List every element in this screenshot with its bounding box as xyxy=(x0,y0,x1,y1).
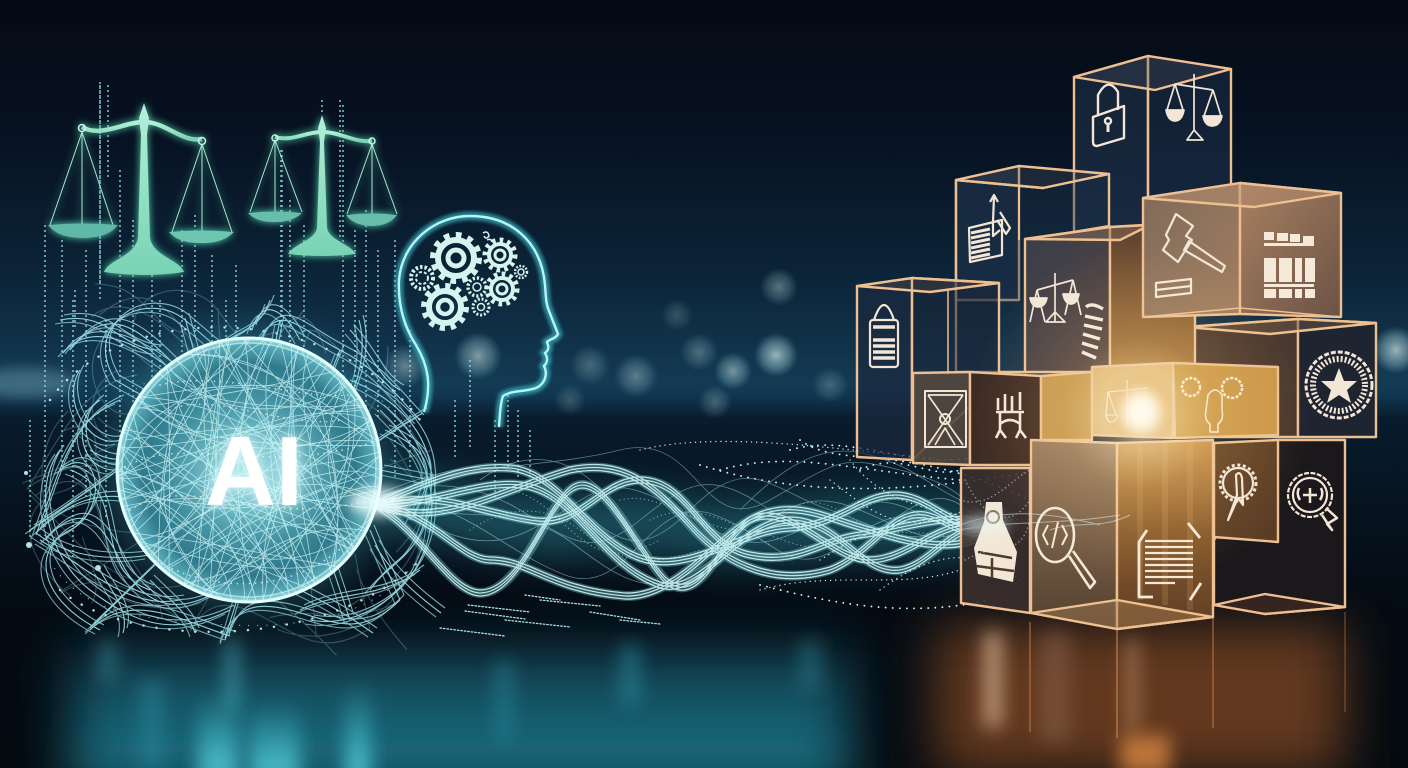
sphere mesh lines xyxy=(118,340,380,600)
AI sphere xyxy=(92,314,405,628)
cube: X frame and robot xyxy=(913,372,1041,465)
icon: document with brackets xyxy=(1139,523,1201,600)
bright ribbon bundles xyxy=(375,467,985,596)
cube: glowing gap block xyxy=(1041,372,1092,440)
head silhouette with gears xyxy=(399,216,558,427)
stream glow xyxy=(375,504,980,533)
cube: lock with form xyxy=(857,278,999,460)
cube: apron with badge xyxy=(961,468,1030,613)
data stream waves from sphere to cubes xyxy=(375,440,1050,636)
icon: code magnifier xyxy=(1036,508,1095,588)
stream light entering cubes xyxy=(960,470,1130,560)
bright stream junction at sphere edge xyxy=(348,488,408,516)
amber light burst at centre of cubes xyxy=(970,245,1310,585)
stream strands xyxy=(375,448,985,584)
speckle field between strands xyxy=(440,487,960,560)
icon: lock form xyxy=(870,305,898,367)
icon: scales xyxy=(1166,74,1222,140)
icon: padlock xyxy=(1093,85,1124,146)
scales of justice, small xyxy=(248,115,397,256)
particle trails xyxy=(440,440,1050,636)
icon: faded scales xyxy=(1106,380,1148,425)
icon: gear pin xyxy=(1220,465,1256,520)
cube: seal with star xyxy=(1186,319,1376,437)
cube: lock and scales xyxy=(1074,56,1231,232)
cube: code magnifier and document xyxy=(1031,440,1213,629)
cube: gavel and table xyxy=(1143,183,1341,317)
icon: gavel xyxy=(1156,214,1225,297)
cube: scales and gears, glowing xyxy=(1092,363,1278,438)
icon: badge tag xyxy=(974,502,1017,582)
neural network web around sphere xyxy=(0,258,472,676)
stack of translucent compliance cubes xyxy=(857,56,1376,629)
icon: data table xyxy=(1264,232,1315,298)
cube: document with arrow xyxy=(956,166,1109,372)
icon: magnifier badge xyxy=(1288,473,1337,530)
cube: gear pin xyxy=(1214,440,1278,542)
icon: X frame xyxy=(925,391,966,447)
bokeh city lights on the horizon xyxy=(0,268,1408,419)
icon: robot arms xyxy=(996,392,1026,438)
icon: gears and figure xyxy=(1182,378,1242,432)
digital rain: falling data columns xyxy=(30,82,530,560)
head outline xyxy=(399,216,558,427)
icon: rolled scroll pen xyxy=(1082,305,1103,358)
scales of justice, large xyxy=(48,103,234,275)
floor reflections: teal left, amber right xyxy=(70,612,1346,768)
AI label: AI xyxy=(205,416,303,526)
cube: magnifier with seal xyxy=(1214,440,1345,614)
icon: file with arrow xyxy=(969,195,1010,262)
cube: scales and pen xyxy=(1025,222,1195,372)
icon: star seal xyxy=(1306,352,1372,418)
gears xyxy=(411,232,527,328)
icon: scales xyxy=(1030,273,1081,322)
